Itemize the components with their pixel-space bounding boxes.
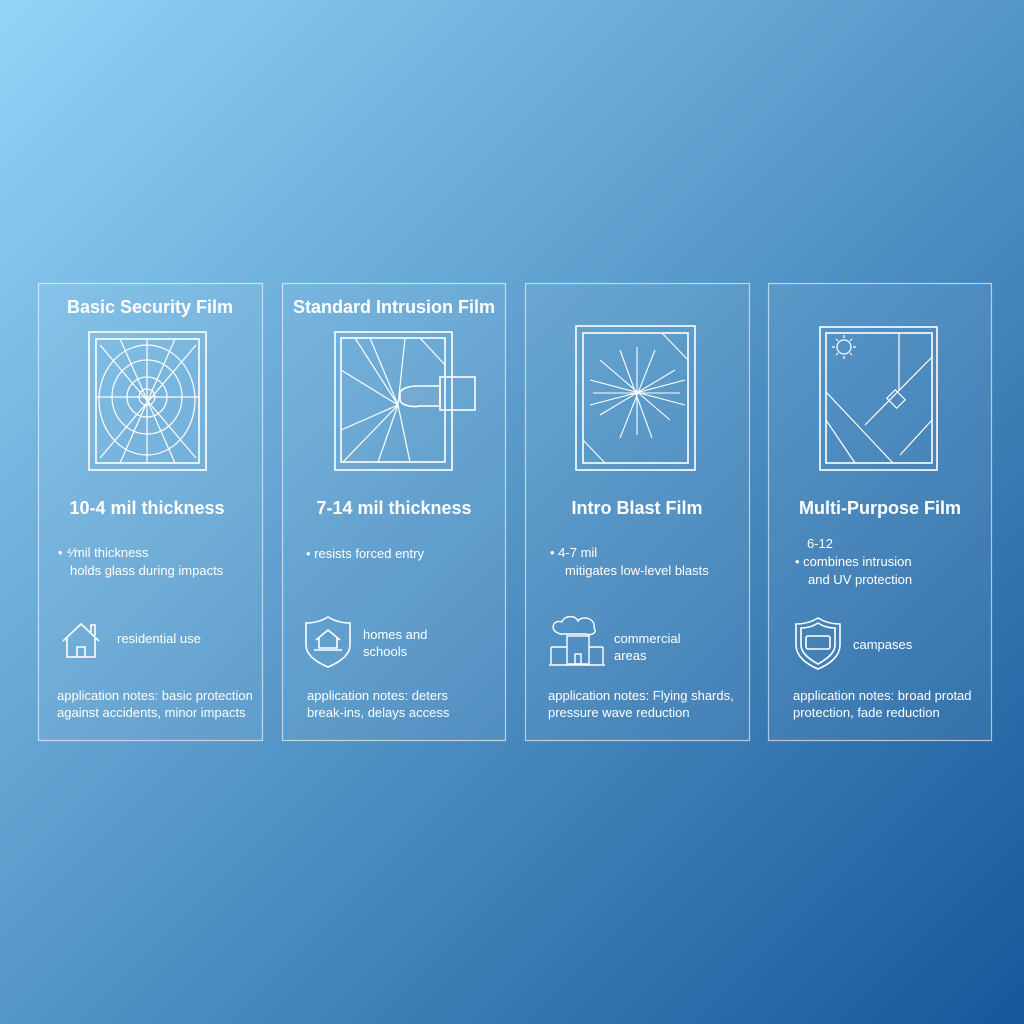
panel: intro blast film [526,284,750,740]
icon: building with cloud [549,617,605,665]
bullet text: • ⁴⁄mil thickness [58,545,149,560]
notes: application notes: broad protad [793,688,972,703]
heading: thickness: 10-4 mil thickness [69,498,225,518]
panel: multi-purpose film: protection, fade reduction [793,705,940,720]
icon: broken window with fist [335,332,475,470]
panel: intro blast film: mitigates low-level blasts [565,563,709,578]
panel: intro blast film: areas [614,648,647,663]
bullet: • 4-7 mil [550,545,597,560]
panel: standard intrusion film [282,284,506,740]
panel: multi-purpose film: • combines intrusion [795,554,912,569]
panel: multi-purpose film: and UV protection [808,572,912,587]
title: basic security film: Basic Security Film [67,297,233,317]
label: commercial [614,631,681,646]
icon: window with sun [820,327,937,470]
panel: basic security film: holds glass during impacts [70,563,224,578]
title: Multi-Purpose Film [799,498,961,518]
title: Standard Intrusion Film [293,297,495,317]
panel: basic security film [38,284,262,740]
bullet: 6-12 [807,536,833,551]
icon: spiderweb cracked window [89,332,206,470]
icon: shield [796,618,840,669]
label: homes and [363,627,427,642]
icon: house [63,624,99,657]
icon: blast window [576,326,695,470]
panel: multi-purpose film [768,284,992,740]
title: Intro Blast Film [571,498,703,518]
label: campases [853,637,913,652]
notes: application notes: deters [307,688,448,703]
bullet: • resists forced entry [306,546,424,561]
notes: application notes: Flying shards, [548,688,734,703]
panel: standard intrusion film: break-ins, delays access [307,705,450,720]
notes: application notes: basic protection [57,688,253,703]
label: residential use: residential use [117,631,201,646]
heading: 7-14 mil thickness [316,498,472,518]
icon: shield house [306,617,350,667]
panel: basic security film: against accidents, minor impacts [57,705,246,720]
panel: standard intrusion film: schools [363,644,408,659]
panel: intro blast film: pressure wave reduction [548,705,690,720]
